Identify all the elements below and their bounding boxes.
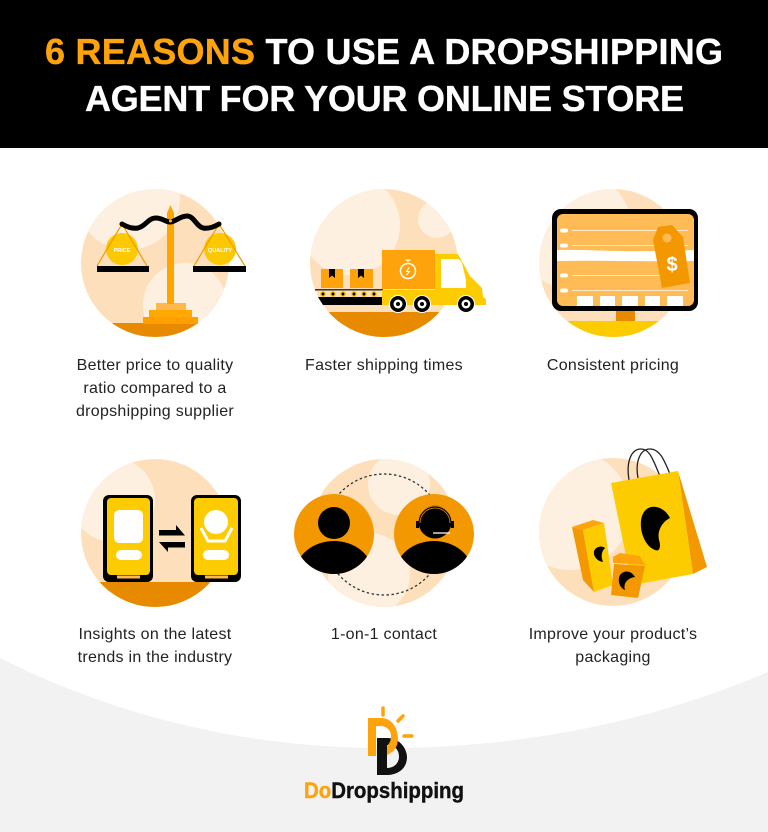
panel: price to quality [76, 189, 246, 420]
caption: trends in the industry [78, 649, 232, 666]
panel: product packaging [510, 449, 707, 666]
icon: orange and black D monogram [368, 718, 407, 775]
logo: DoDropshipping [304, 708, 464, 803]
title banner: 6 REASONS TO USE A DROPSHIPPING [45, 31, 723, 72]
icon: two contacts with headset [294, 453, 474, 615]
caption: ratio compared to a [83, 380, 227, 397]
panel: consistent pricing [539, 189, 698, 374]
panel: 1-on-1 contact [294, 453, 474, 643]
caption: Better price to quality [77, 357, 233, 374]
caption: Insights on the latest [79, 626, 232, 643]
icon: delivery truck [310, 189, 486, 337]
icon: monitor with price tag: $ [666, 254, 678, 276]
caption: Improve your product’s [529, 626, 697, 643]
title banner: AGENT FOR YOUR ONLINE STORE [85, 78, 684, 119]
wordmark: DoDropshipping [304, 778, 464, 803]
caption: dropshipping supplier [76, 403, 234, 420]
background footer curve [0, 658, 768, 832]
icon: monitor with price tag [539, 189, 698, 337]
caption: Faster shipping times [305, 357, 463, 374]
icon: sun rays [383, 708, 412, 736]
caption: packaging [575, 649, 651, 666]
caption: Consistent pricing [547, 357, 679, 374]
icon: balance scale [81, 189, 246, 337]
icon: two phones exchanging data [81, 459, 241, 607]
icon: balance scale: QUALITY [208, 248, 232, 254]
icon: shopping bags and cup [539, 448, 707, 606]
title banner [0, 0, 768, 148]
icon: balance scale: PRICE [114, 248, 131, 254]
panel: shipping times [306, 189, 486, 374]
caption: 1-on-1 contact [331, 626, 437, 643]
panel: insights on trends [70, 458, 241, 666]
